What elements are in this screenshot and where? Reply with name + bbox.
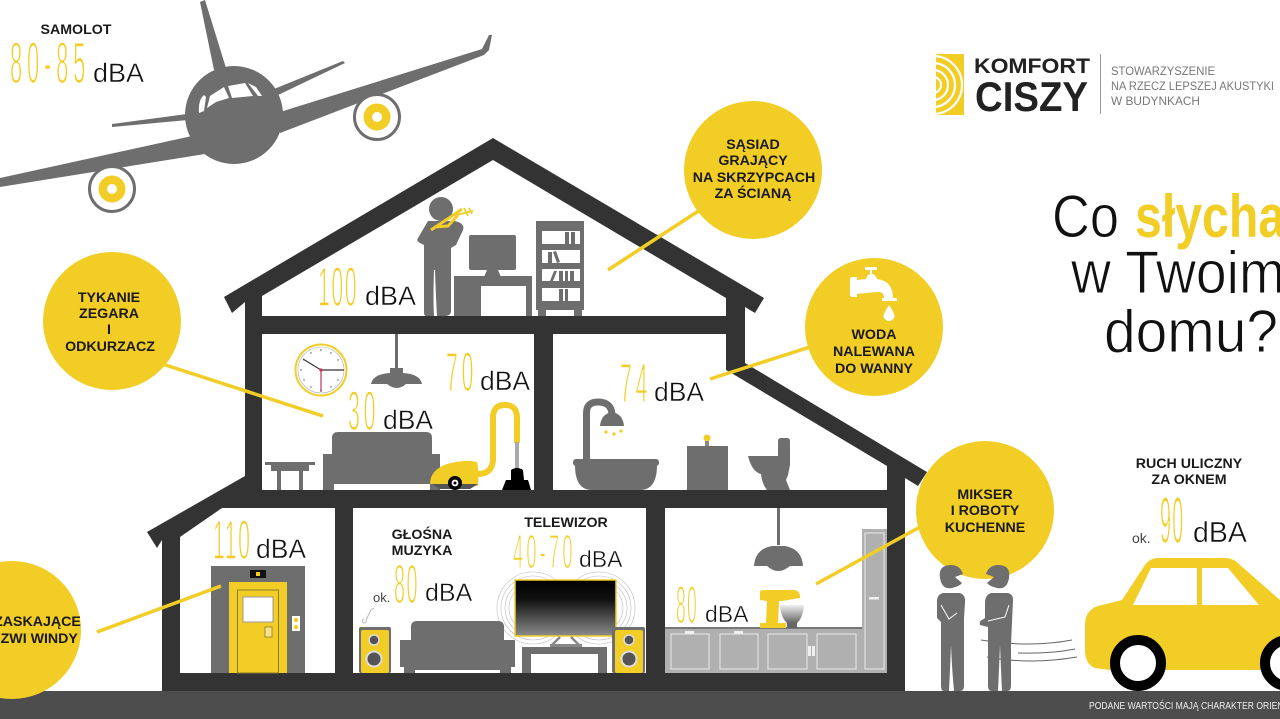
callout: elevator doors: [0, 561, 81, 699]
label: 70 dBA: 70: [446, 341, 477, 403]
living room: [265, 334, 531, 490]
icon: wall clock: [296, 344, 346, 396]
label: street traffic: ok.: [1132, 530, 1151, 546]
motion lines behind car: [981, 640, 1077, 661]
icon: car: [1085, 558, 1280, 686]
plane label: dBA: [93, 58, 144, 88]
label: 30 dBA: 30: [348, 380, 379, 442]
icon: music note: [362, 608, 374, 623]
callout: water: NALEWANA: [833, 344, 915, 360]
callout: water: WODA: [852, 327, 896, 343]
callout: clock and vacuum: TYKANIE: [78, 290, 140, 306]
attic room: violinist, desk, bookshelf: [318, 197, 584, 318]
logo: W BUDYNKACH: [1111, 94, 1200, 108]
music label: GŁOŚNA: [392, 525, 452, 543]
icon: kitchen lamp: [754, 508, 803, 571]
callout: clock and vacuum: I: [107, 322, 111, 338]
callout: clock and vacuum: [43, 252, 181, 390]
elevator room: [211, 509, 306, 673]
logo: KOMFORT: [974, 54, 1090, 78]
title: Co: [1052, 183, 1119, 250]
label: street traffic: dBA: [1193, 517, 1247, 549]
icon: computer desk: [454, 235, 532, 316]
callout: kitchen mixer: KUCHENNE: [945, 520, 1025, 536]
label: 100 dBA: dBA: [365, 281, 416, 311]
label: 70 dBA: [446, 341, 530, 403]
icon: kitchen units: [665, 529, 887, 673]
label: 110 dBA: 110: [213, 509, 251, 571]
label: 30 dBA: [348, 380, 433, 442]
logo: [904, 54, 1274, 120]
callout: clock and vacuum: ZEGARA: [79, 306, 139, 322]
label: street traffic: RUCH ULICZNY: [1136, 456, 1243, 472]
callout: violin neighbour: SĄSIAD: [726, 137, 780, 153]
icon: ceiling lamp: [371, 334, 422, 388]
icon: bath with shower: [573, 402, 659, 490]
label: street traffic: 90: [1160, 485, 1184, 558]
label: 110 dBA: dBA: [256, 534, 306, 564]
label: 74 dBA: 74: [620, 352, 651, 414]
music label: 80: [394, 554, 419, 615]
label: street traffic: [1132, 456, 1247, 558]
icon: bookshelf: [536, 221, 584, 316]
tv label: dBA: [579, 546, 623, 572]
callout lines: [97, 210, 920, 632]
callout: clock and vacuum: ODKURZACZ: [65, 339, 155, 355]
label: 80 dBA: 80: [676, 576, 698, 635]
callout: violin neighbour: [684, 101, 822, 239]
icon: talking people: [937, 565, 1013, 691]
ground strip: [0, 691, 1280, 719]
music label: dBA: [425, 579, 473, 607]
icon: sofa: [323, 432, 440, 490]
label: 110 dBA: [213, 509, 306, 571]
callout: kitchen mixer: MIKSER: [957, 487, 1013, 503]
title: [1052, 183, 1280, 365]
icon: sofa: [400, 621, 515, 673]
music label: MUZYKA: [392, 543, 452, 559]
callout: violin neighbour: GRAJĄCY: [718, 153, 788, 169]
label: 80 dBA: [676, 576, 749, 635]
icon: toilet: [748, 438, 790, 490]
sound waves around tv: [497, 572, 635, 644]
label: 30 dBA: dBA: [383, 405, 433, 435]
icon: right speaker: [612, 627, 645, 673]
bathroom: [573, 352, 790, 490]
logo: STOWARZYSZENIE: [1111, 64, 1215, 78]
label: street traffic: ZA OKNEM: [1151, 472, 1227, 488]
icon: side table: [265, 462, 315, 490]
callout: violin neighbour: NA SKRZYPCACH: [693, 170, 815, 186]
label: 100 dBA: 100: [318, 256, 358, 318]
label: 80 dBA: dBA: [705, 601, 749, 627]
kitchen: [665, 508, 887, 673]
icon: tv: [515, 580, 616, 647]
label: 70 dBA: dBA: [480, 366, 530, 396]
callout: water: DO WANNY: [835, 361, 914, 377]
icon: cabinet with soap: [687, 434, 728, 490]
lounge: [359, 515, 645, 673]
plane label: SAMOLOT: [41, 22, 112, 38]
music label: ok.: [373, 590, 390, 605]
icon: left speaker: [359, 627, 391, 673]
label: 74 dBA: dBA: [654, 377, 704, 407]
plane label: [10, 22, 144, 96]
icon: violinist: [417, 197, 473, 316]
tv label: TELEWIZOR: [524, 515, 608, 531]
callout: kitchen mixer: [916, 441, 1054, 579]
icon: tap: [850, 267, 897, 321]
logo: CISZY: [975, 73, 1088, 120]
music label: [373, 525, 473, 615]
house structure: [147, 138, 927, 691]
callout: violin neighbour: ZA ŚCIANĄ: [715, 184, 791, 202]
tv label: [513, 515, 623, 579]
airplane: [0, 0, 492, 212]
tv label: 40-70: [513, 524, 576, 579]
icon: stand mixer: [760, 590, 804, 628]
label: 100 dBA: [318, 256, 416, 318]
icon: vacuum cleaner: [430, 405, 531, 490]
icon: elevator door: [211, 566, 305, 673]
plane label: 80-85: [10, 31, 90, 96]
callout: water: [805, 258, 943, 396]
callout: kitchen mixer: I ROBOTY: [951, 503, 1020, 519]
label: 74 dBA: [620, 352, 704, 414]
icon: tv table: [522, 647, 607, 673]
